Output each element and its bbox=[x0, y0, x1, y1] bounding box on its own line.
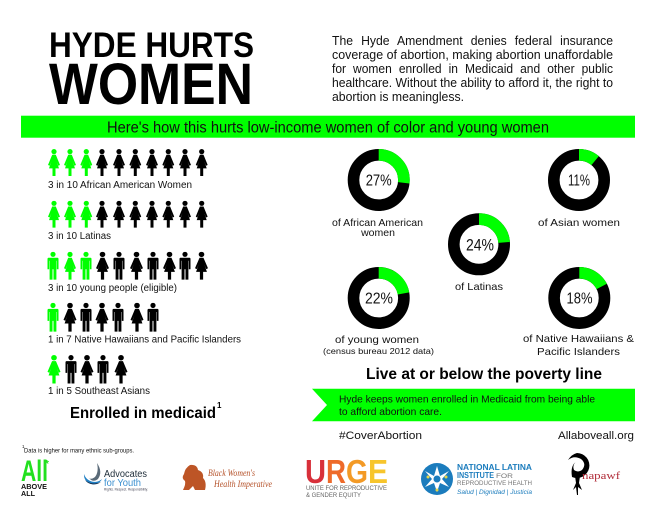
logo: URGE: R bbox=[326, 453, 346, 490]
donut: Asian women 11%: 11% bbox=[568, 172, 590, 190]
logo: National Latina Institute for Reproductive Health bbox=[421, 462, 532, 496]
logo: Black Women's Health Imperative: Health Imperative bbox=[213, 479, 272, 489]
donut: Latinas 24%: 24% bbox=[466, 236, 494, 254]
logo: URGE: & GENDER EQUITY bbox=[306, 493, 361, 499]
footnote: 1 bbox=[22, 444, 25, 449]
logo: All Above All: All bbox=[21, 455, 48, 488]
pictogram row: Southeast Asians: 1 in 5 Southeast Asians bbox=[48, 386, 150, 397]
intro text block: coverage of abortion, making abortion unaffordable bbox=[332, 47, 613, 62]
logo: National Latina Institute for Reproductive Health: INSTITUTE bbox=[457, 470, 494, 480]
donut: Native Hawaiians and Pacific Islanders 18% bbox=[523, 273, 634, 358]
title bbox=[49, 26, 254, 117]
logo: napawf bbox=[568, 453, 621, 495]
footnote: Data is higher for many ethnic sub-groups. bbox=[24, 448, 134, 454]
pictogram row: Latinas bbox=[48, 201, 208, 242]
heading: live at or below the poverty line: Live at or below the poverty line bbox=[366, 366, 602, 383]
donut: African American women 27%: women bbox=[360, 227, 395, 239]
donut: Native Hawaiians and Pacific Islanders 18%: of Native Hawaiians & bbox=[523, 333, 634, 345]
logo: Black Women's Health Imperative: Black Women's bbox=[208, 468, 255, 478]
donut: African American women 27%: of African American bbox=[332, 217, 423, 229]
logo: Black Women's Health Imperative bbox=[183, 465, 272, 490]
logo: National Latina Institute for Reproductive Health: REPRODUCTIVE HEALTH bbox=[457, 480, 532, 487]
hashtag: #CoverAbortion bbox=[339, 430, 422, 442]
donut: young women 22% bbox=[323, 273, 434, 356]
donut: Latinas 24% bbox=[454, 219, 504, 293]
donut: Asian women 11% bbox=[538, 155, 620, 229]
pictogram row: Southeast Asians bbox=[48, 355, 150, 397]
logo: URGE: UNITE FOR REPRODUCTIVE bbox=[306, 486, 387, 492]
logo: Advocates for Youth bbox=[84, 463, 148, 492]
logo: All Above All: ALL bbox=[21, 489, 35, 498]
green arrow callout: to afford abortion care. bbox=[339, 406, 442, 418]
donut: Latinas 24%: of Latinas bbox=[455, 281, 503, 293]
donut: Asian women 11%: of Asian women bbox=[538, 217, 620, 229]
logo: URGE bbox=[305, 453, 388, 499]
logo: Advocates for Youth: Advocates bbox=[104, 469, 147, 480]
green arrow callout bbox=[312, 389, 635, 421]
heading: enrolled in medicaid: 1 bbox=[217, 401, 222, 410]
intro text block bbox=[332, 33, 613, 104]
logo: Advocates for Youth: Rights. Respect. Responsibility. bbox=[104, 488, 148, 492]
title: WOMEN bbox=[49, 52, 253, 117]
logo: URGE: U bbox=[305, 453, 326, 490]
pictogram row: Native Hawaiians and Pacific Islanders bbox=[48, 303, 241, 346]
donut: African American women 27% bbox=[332, 155, 423, 239]
logo: napawf: napawf bbox=[582, 471, 621, 482]
heading: enrolled in medicaid: Enrolled in medicaid bbox=[70, 405, 216, 422]
donut: young women 22%: (census bureau 2012 data) bbox=[323, 347, 434, 356]
pictogram row: young people bbox=[48, 252, 208, 294]
footnote bbox=[22, 444, 134, 454]
pictogram row: African American women: 3 in 10 African American Women bbox=[48, 180, 192, 191]
intro text block: abortion is meaningless. bbox=[332, 89, 464, 104]
intro text block: The Hyde Amendment denies federal insurance bbox=[332, 33, 613, 48]
donut: young women 22%: of young women bbox=[335, 334, 419, 346]
intro text block: for women enrolled in Medicaid and other public bbox=[332, 61, 613, 76]
donut: Native Hawaiians and Pacific Islanders 18%: 18% bbox=[566, 290, 593, 308]
donut: young women 22%: 22% bbox=[365, 290, 393, 308]
logo: All Above All bbox=[21, 455, 49, 498]
logo: All Above All: * bbox=[45, 459, 49, 470]
pictogram row: African American women bbox=[48, 149, 208, 191]
intro text block: healthcare. Without the ability to afford it, the right to bbox=[332, 75, 613, 90]
green arrow callout: Hyde keeps women enrolled in Medicaid from being able bbox=[339, 394, 595, 406]
donut: African American women 27%: 27% bbox=[366, 172, 392, 190]
green heading banner bbox=[21, 116, 635, 138]
green heading banner: Here's how this hurts low-income women of color and young women bbox=[107, 120, 549, 136]
logo: URGE: E bbox=[368, 453, 388, 490]
title: HYDE HURTS bbox=[49, 26, 254, 65]
pictogram row: Latinas: 3 in 10 Latinas bbox=[48, 231, 111, 242]
website: Allaboveall.org bbox=[558, 430, 634, 442]
logo: National Latina Institute for Reproductive Health: NATIONAL LATINA bbox=[457, 462, 532, 472]
pictogram row: young people: 3 in 10 young people (eligible) bbox=[48, 283, 177, 294]
logo: All Above All: ABOVE bbox=[21, 482, 47, 491]
donut: Native Hawaiians and Pacific Islanders 18%: Pacific Islanders bbox=[537, 346, 620, 358]
pictogram row: Native Hawaiians and Pacific Islanders: 1 in 7 Native Hawaiians and Pacific Islanders bbox=[48, 334, 241, 346]
logo: Advocates for Youth: for Youth bbox=[104, 478, 141, 489]
logo: URGE: G bbox=[346, 453, 368, 490]
logo: National Latina Institute for Reproductive Health: Salud | Dignidad | Justicia bbox=[457, 489, 532, 496]
logo: National Latina Institute for Reproductive Health: FOR bbox=[496, 473, 513, 480]
